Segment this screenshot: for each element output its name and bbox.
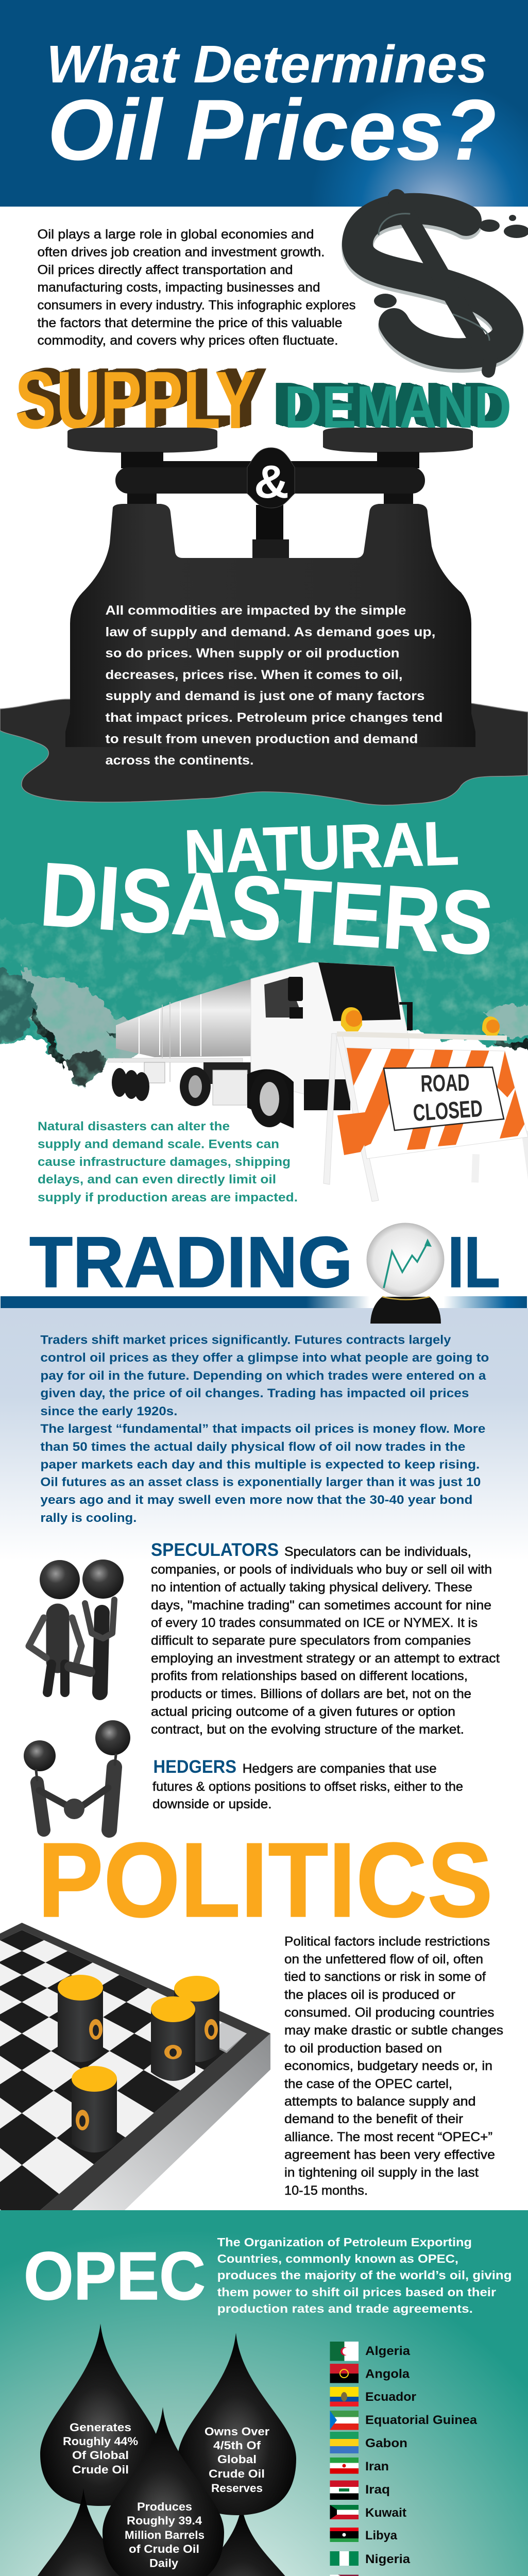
speculators paragraph: difficult to separate pure speculators from companies [151, 1633, 471, 1648]
illustration: balance scale [65, 428, 475, 747]
hedgers paragraph: downside or upside. [152, 1797, 272, 1811]
oil drop: global crude oil share: Generates [70, 2421, 131, 2434]
flag: Nigeria [330, 2551, 359, 2566]
intro paragraph [37, 227, 355, 348]
politics paragraph: agreement has been very effective [284, 2147, 495, 2162]
supply and demand paragraph: All commodities are impacted by the simple [105, 603, 406, 618]
supply and demand paragraph: that impact prices. Petroleum price changes tend [105, 710, 442, 725]
road closed sign text [412, 1069, 483, 1126]
oil drop: daily production: Million Barrels [125, 2529, 205, 2541]
natural disasters paragraph: cause infrastructure damages, shipping [38, 1155, 291, 1169]
trading paragraph: Oil futures as an asset class is exponentially larger than it was just 10 [40, 1476, 481, 1489]
illustration: hedger figures shaking hands [24, 1720, 130, 1830]
politics paragraph: tied to sanctions or risk in some of [284, 1970, 486, 1984]
OPEC paragraph [217, 2235, 512, 2315]
politics paragraph: to oil production based on [284, 2041, 442, 2056]
road closed sign text: ROAD [420, 1069, 470, 1097]
trading paragraph: given day, the price of oil changes. Trading has impacted oil prices [40, 1386, 469, 1400]
natural disasters paragraph: Natural disasters can alter the [38, 1120, 230, 1133]
illustration: chessboard with oil barrels [0, 1923, 270, 2228]
oil drop: crude oil reserves: Crude Oil [209, 2467, 265, 2480]
oil puddle [0, 699, 528, 805]
oil drop: daily production: of Crude Oil [129, 2543, 199, 2555]
country names: Gabon [365, 2436, 407, 2450]
oil drop: daily production: Produces [137, 2500, 192, 2513]
speculators paragraph: of every 10 trades consummated on ICE or NYMEX. It is [151, 1616, 478, 1630]
oil drop: crude oil reserves [178, 2333, 296, 2515]
politics paragraph: on the unfettered flow of oil, often [284, 1952, 483, 1967]
trading paragraph [40, 1333, 489, 1525]
speculators paragraph: profits from relationships based on different locations, [151, 1669, 468, 1683]
oil drop: global crude oil share [40, 2324, 161, 2506]
oil drop: daily production: Roughly 39.4 [127, 2514, 202, 2527]
title: Oil Prices? [47, 81, 497, 178]
intro paragraph: consumers in every industry. This infographic explores [37, 298, 355, 312]
ampersand: & [254, 456, 289, 508]
illustration: speculator figures [29, 1560, 124, 1692]
politics paragraph [284, 1934, 503, 2198]
oil drop: export revenue [181, 2504, 302, 2576]
speculators paragraph: days, "machine trading" can sometimes account for nine [151, 1598, 491, 1613]
icon: crystal ball with chart [367, 1223, 444, 1324]
OPEC member list with flags [330, 2342, 503, 2576]
intro paragraph: manufacturing costs, impacting businesses and [37, 280, 320, 295]
heading: speculators: SPECULATORS [151, 1540, 279, 1560]
hedgers paragraph: futures & options positions to offset risks, either to the [152, 1780, 463, 1794]
heading: trading oil: TRADING [29, 1222, 353, 1302]
heading: supply: SUPPLY [15, 355, 256, 446]
teal band behind oil puddle [0, 724, 528, 945]
speculators paragraph [151, 1545, 500, 1737]
intro paragraph: Oil plays a large role in global economies and [37, 227, 314, 242]
politics paragraph: may make drastic or subtle changes [284, 2023, 503, 2038]
speculators paragraph: contract, but on the evolving structure of the market. [151, 1722, 464, 1737]
politics paragraph: consumed. Oil producing countries [284, 2005, 495, 2020]
natural disasters paragraph: delays, and can even directly limit oil [38, 1173, 276, 1187]
country names: Iraq [365, 2483, 390, 2497]
OPEC paragraph: production rates and trade agreements. [217, 2302, 473, 2315]
hedgers paragraph: Hedgers are companies that use [243, 1761, 437, 1776]
country names: Ecuador [365, 2390, 416, 2404]
country names: Iran [365, 2460, 389, 2473]
oil drop: global crude oil share: Crude Oil [72, 2463, 129, 2476]
trading paragraph: than 50 times the actual daily physical flow of oil now trades in the [40, 1440, 465, 1454]
intro paragraph: Oil prices directly affect transportation and [37, 263, 293, 277]
speculators paragraph: employing an investment strategy or an attempt to extract [151, 1651, 500, 1666]
trading paragraph: rally is cooling. [40, 1511, 137, 1525]
speculators paragraph: companies, or pools of individuals who buy or sell oil with [151, 1562, 492, 1577]
trading paragraph: paper markets each day and this multiple is expected to keep rising. [40, 1458, 480, 1471]
supply and demand paragraph: law of supply and demand. As demand goes up, [105, 625, 436, 639]
speculators paragraph: Speculators can be individuals, [284, 1545, 471, 1559]
country names: Nigeria [365, 2552, 411, 2566]
politics paragraph: Political factors include restrictions [284, 1934, 490, 1948]
supply and demand paragraph: across the continents. [105, 753, 253, 768]
flag: Gabon [330, 2432, 359, 2453]
trading paragraph: since the early 1920s. [40, 1404, 177, 1418]
flag: Ecuador [330, 2387, 359, 2406]
oil drop: crude oil reserves: 4/5th Of [213, 2439, 261, 2452]
supply and demand paragraph [105, 603, 442, 768]
oil drop: daily production: Daily [149, 2556, 179, 2570]
intro paragraph: often drives job creation and investment growth. [37, 245, 325, 260]
politics paragraph: 10-15 months. [284, 2183, 368, 2198]
politics paragraph: the case of the OPEC cartel, [284, 2077, 452, 2091]
OPEC paragraph: The Organization of Petroleum Exporting [217, 2235, 472, 2249]
intro paragraph: the factors that determine the price of this valuable [37, 316, 342, 330]
heading: politics: POLITICS [38, 1821, 493, 1939]
country names: Equatorial Guinea [365, 2413, 478, 2427]
title [46, 35, 497, 178]
flag: Kuwait [330, 2505, 359, 2519]
trading paragraph: The largest “fundamental” that impacts oil prices is money flow. More [40, 1422, 485, 1436]
politics paragraph: economics, budgetary needs or, in [284, 2059, 492, 2073]
oil drop: global crude oil share: Of Global [72, 2449, 129, 2462]
title: What Determines [46, 35, 487, 94]
trading bar [1, 1296, 527, 1308]
road closed sign text: CLOSED [412, 1095, 483, 1126]
supply and demand paragraph: decreases, prices rise. When it comes to oil, [105, 668, 403, 682]
intro paragraph: commodity, and covers why prices often fluctuate. [37, 333, 338, 348]
speculators paragraph: actual pricing outcome of a given futures or option [151, 1704, 455, 1719]
OPEC paragraph: produces the majority of the world’s oil, giving [217, 2268, 512, 2282]
oil drop: daily production [103, 2407, 224, 2576]
country names: Libya [365, 2529, 398, 2543]
trading paragraph: pay for oil in the future. Depending on which trades were entered on a [40, 1369, 486, 1383]
hedgers paragraph [152, 1761, 463, 1811]
natural disasters paragraph [38, 1120, 298, 1205]
oil drop: crude oil reserves: Reserves [211, 2482, 263, 2495]
trading section background [0, 1308, 528, 1561]
supply and demand paragraph: so do prices. When supply or oil production [105, 646, 400, 660]
header banner [0, 0, 528, 207]
panel: OPEC background [0, 2210, 528, 2576]
trading paragraph: control oil prices as they offer a glimpse into what people are going to [40, 1351, 489, 1365]
flag: Algeria [330, 2342, 359, 2361]
politics paragraph: alliance. The most recent “OPEC+” [284, 2130, 492, 2144]
country names: Algeria [365, 2344, 411, 2358]
illustration: tanker truck [108, 962, 413, 1128]
illustration: road closed barricade [323, 1007, 528, 1201]
oil drop: crude oil reserves: Global [217, 2453, 257, 2466]
natural disasters paragraph: supply and demand scale. Events can [38, 1138, 279, 1151]
heading: trading oil [29, 1222, 500, 1302]
heading: natural disasters: NATURAL [183, 808, 460, 887]
heading: OPEC: OPEC [24, 2238, 206, 2314]
supply and demand paragraph: to result from uneven production and demand [105, 732, 418, 746]
texture: storm brush [0, 922, 528, 1091]
flag: Iran [330, 2458, 359, 2474]
OPEC paragraph: Countries, commonly known as OPEC, [217, 2252, 458, 2265]
supply and demand paragraph: supply and demand is just one of many factors [105, 689, 424, 703]
politics paragraph: demand to the benefit of their [284, 2112, 463, 2126]
politics paragraph: in tightening oil supply in the last [284, 2165, 479, 2180]
flag: Qatar [330, 2575, 359, 2576]
icon: oil dollar sign [357, 198, 528, 371]
politics paragraph: the places oil is produced or [284, 1988, 455, 2002]
trading paragraph: Traders shift market prices significantly. Futures contracts largely [40, 1333, 451, 1347]
country names: Kuwait [365, 2506, 406, 2520]
country names [365, 2344, 503, 2576]
speculators paragraph: no intention of actually taking physical delivery. These [151, 1580, 472, 1595]
oil drop: natural gas reserves [23, 2488, 144, 2576]
flag: Angola [330, 2364, 359, 2383]
OPEC paragraph: them power to shift oil prices based on their [217, 2285, 496, 2299]
heading: hedgers: HEDGERS [154, 1757, 236, 1777]
flag: Libya [330, 2528, 359, 2542]
natural disasters paragraph: supply if production areas are impacted. [38, 1191, 298, 1205]
oil drop: global crude oil share: Roughly 44% [63, 2435, 138, 2448]
speculators paragraph: products or times. Billions of dollars are bet, not on the [151, 1687, 471, 1701]
politics paragraph: attempts to balance supply and [284, 2094, 476, 2109]
flag: Equatorial Guinea [330, 2411, 359, 2430]
oil drop: crude oil reserves: Owns Over [205, 2425, 269, 2438]
country names: Angola [365, 2367, 410, 2381]
trading paragraph: years ago and it may swell even more now that the 30-40 year bond [40, 1493, 472, 1507]
flag: Iraq [330, 2480, 359, 2500]
heading: trading oil: IL [448, 1222, 500, 1302]
